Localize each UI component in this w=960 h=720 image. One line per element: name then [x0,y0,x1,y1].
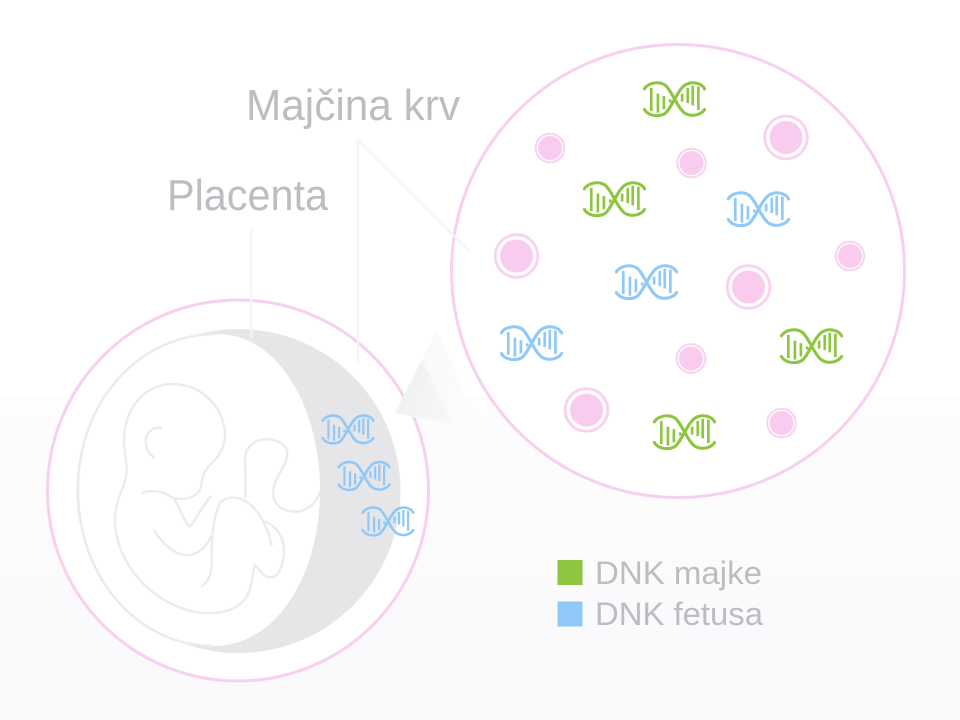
legend swatch: maternal [558,560,582,585]
icon: fetal DNA 4 [728,193,789,226]
amniotic sac [78,334,320,646]
small blood cells [536,134,864,437]
leader line: placenta [250,228,252,338]
large blood cells [495,116,807,431]
icon: fetus [115,384,320,613]
icon: fetal DNA 6 [501,327,562,360]
legend label: fetal: DNK fetusa [595,596,763,632]
legend label: maternal: DNK majke [595,555,762,591]
icon: maternal DNA 3 [781,330,842,363]
icon: fetal DNA 5 [616,266,677,299]
panel: maternal blood circle [452,44,904,498]
placenta crescent [76,329,400,653]
icon: fetal DNA 1 [323,415,373,443]
panel: placenta circle [48,300,428,681]
icon: fetal DNA 3 [363,507,413,535]
icon: fetal DNA 2 [339,462,389,490]
legend swatch: fetal [558,602,582,626]
icon: maternal DNA 2 [584,183,645,216]
heading: placenta: Placenta [167,171,328,220]
legend [558,555,763,632]
leader line: maternal blood [358,140,470,363]
zoom pointer triangles [395,330,483,433]
icon: maternal DNA 4 [654,416,715,449]
icon: maternal DNA 1 [644,83,705,116]
heading: maternal blood: Majčina krv [246,81,460,130]
